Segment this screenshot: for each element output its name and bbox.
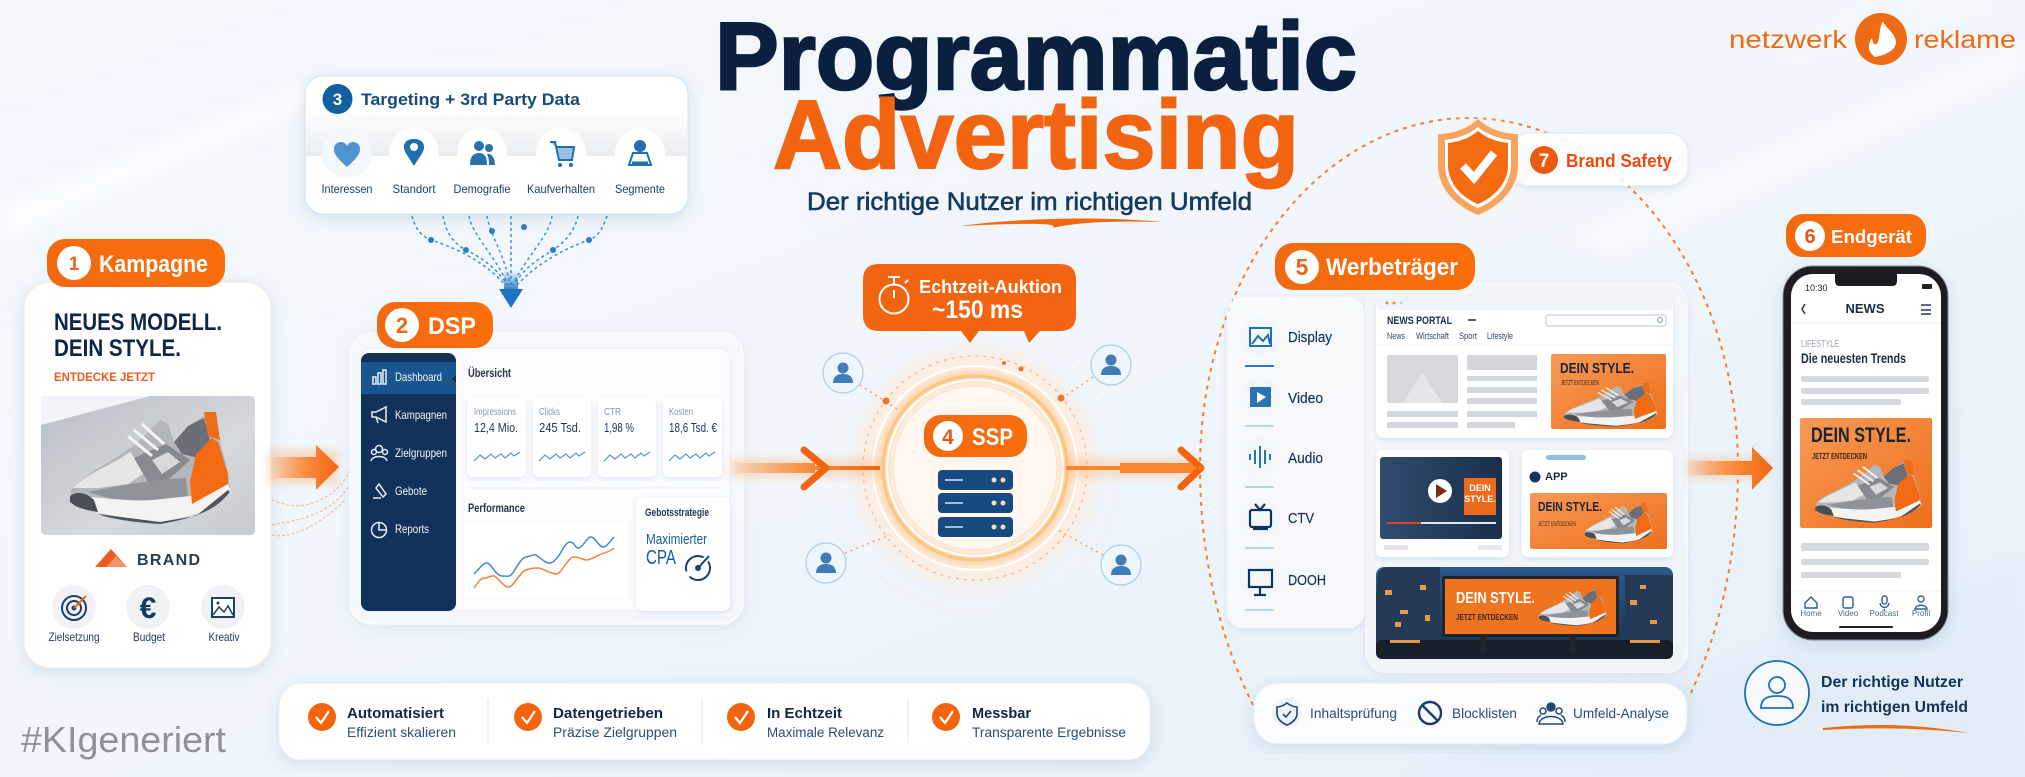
- brand logo: [95, 549, 200, 569]
- badge: 1 Kampagne: Kampagne: [99, 251, 208, 278]
- phone: end device: 10:30: [1805, 283, 1828, 293]
- benefit: automated: Automatisiert: [347, 706, 444, 722]
- SSP glow rings: [831, 324, 1119, 612]
- placement: news portal: [1376, 297, 1673, 438]
- icon: demographics: [457, 128, 507, 178]
- badge: 1 Kampagne: 1: [69, 254, 80, 275]
- icon: servers: [938, 470, 1013, 537]
- icon: euro: €: [140, 592, 157, 625]
- placement: video player: DEIN: [1469, 483, 1491, 493]
- phone tab bar: Podcast: [1870, 609, 1899, 618]
- KPI card: costs: 18,6 Tsd. €: [669, 420, 718, 435]
- icon: audience analysis: [1537, 703, 1565, 724]
- placement: video player: STYLE.: [1464, 494, 1496, 504]
- icon: image: [201, 585, 245, 629]
- badge: 6 Endgeraet: Endgerät: [1831, 227, 1912, 247]
- benefit: automated: [308, 703, 456, 740]
- panel 5: media formats container: [1227, 283, 1687, 672]
- KPI card: impressions: [467, 398, 526, 477]
- KPI card: CTR: 1,98 %: [604, 420, 634, 435]
- channel list: Audio: [1288, 450, 1323, 467]
- placement: news portal: Wirtschaft: [1416, 331, 1449, 341]
- placement: news portal: News: [1387, 331, 1405, 341]
- ad banner: [1551, 354, 1666, 429]
- panel 3: targeting and 3rd party data: [305, 76, 688, 214]
- benefit: real time: Maximale Relevanz: [767, 725, 884, 740]
- KPI card: clicks: Clicks: [539, 407, 560, 418]
- badge: 2 DSP: [377, 302, 493, 348]
- placement: news portal: Sport: [1459, 331, 1477, 341]
- phone tab bar: [1791, 591, 1941, 628]
- goal labels: Kreativ: [208, 630, 240, 644]
- KPI card: CTR: [598, 398, 656, 477]
- icon: video: [1250, 387, 1271, 407]
- product image: shoe: [41, 396, 255, 535]
- arrow: DSP to SSP: [730, 450, 880, 487]
- KPI card: clicks: 245 Tsd.: [539, 420, 581, 435]
- panel 1: campaign card: [24, 282, 271, 668]
- KPI card: impressions: Impressions: [474, 407, 516, 418]
- placement: digital billboard: [1376, 567, 1673, 659]
- icon: shield check: [1272, 698, 1302, 728]
- icon: connected TV: [1250, 504, 1271, 529]
- panel: content checks: [1254, 683, 1687, 744]
- arrow: media to device: [1687, 447, 1773, 490]
- goal labels: Budget: [133, 630, 166, 644]
- badge: 4 SSP: SSP: [972, 424, 1013, 451]
- ad in phone: [1800, 418, 1932, 528]
- performance chart: Performance: [468, 501, 525, 515]
- badge: 4 SSP: 4: [942, 426, 954, 449]
- watermark: #KIgeneriert: [21, 719, 226, 760]
- overview heading: Übersicht: [468, 365, 511, 380]
- phone: end device: Die neuesten Trends: [1801, 350, 1906, 366]
- bidding strategy card: Maximierter: [646, 531, 707, 548]
- logo: netzwerk reklame: reklame: [1914, 26, 2016, 54]
- icon: heart interests: [322, 128, 372, 178]
- badge: 3: [322, 84, 352, 114]
- panel 2: DSP dashboard: [350, 333, 743, 624]
- target labels: Kaufverhalten: [527, 182, 595, 196]
- channel list: DOOH: [1288, 572, 1326, 589]
- benefit: data driven: Präzise Zielgruppen: [553, 725, 677, 740]
- placement: mobile app: JETZT ENTDECKEN: [1538, 522, 1576, 528]
- title: Programmatic: [715, 3, 1357, 110]
- badge: 5 Werbetraeger: Werbeträger: [1326, 254, 1458, 281]
- placement: digital billboard: JETZT ENTDECKEN: [1456, 613, 1518, 622]
- benefit: data driven: Datengetrieben: [553, 706, 663, 722]
- badge: 6 Endgeraet: [1786, 214, 1926, 257]
- performance chart: [464, 488, 722, 598]
- callout: brand safety: 7: [1539, 151, 1549, 172]
- benefit: measurable: [932, 703, 1126, 740]
- channel list: [1227, 297, 1364, 628]
- channel list: Video: [1288, 390, 1323, 407]
- icon: display: [1250, 328, 1271, 346]
- benefit: data driven: [514, 703, 677, 740]
- sidebar navigation: Reports: [395, 522, 429, 536]
- icon: location: [389, 128, 439, 178]
- badge: 5 Werbetraeger: 5: [1296, 254, 1309, 280]
- benefit: measurable: Messbar: [972, 706, 1031, 722]
- tagline: right user: Der richtige Nutzer: [1821, 674, 1963, 691]
- panel: benefits bar: [279, 683, 1150, 760]
- benefit: real time: [727, 703, 884, 740]
- badge: 4 SSP: [924, 415, 1027, 457]
- badge: 3: 3: [333, 90, 342, 109]
- sidebar navigation: Dashboard: [395, 370, 442, 384]
- subtitle: [807, 188, 1252, 228]
- KPI card: CTR: CTR: [604, 407, 621, 418]
- bidding strategy card: Gebotsstrategie: [645, 507, 709, 519]
- headline: [54, 309, 222, 362]
- phone tab bar: Video: [1838, 609, 1859, 618]
- placement: mobile app: DEIN STYLE.: [1538, 499, 1602, 514]
- sidebar navigation: Zielgruppen: [395, 446, 447, 460]
- icon: blocklist: [1419, 702, 1441, 724]
- placement: news portal: NEWS PORTAL: [1387, 315, 1452, 327]
- channel list: CTV: [1288, 510, 1314, 527]
- phone tab bar: Home: [1800, 609, 1822, 618]
- icon: shopping cart: [536, 128, 586, 178]
- users around SSP: [806, 345, 1141, 585]
- benefit: automated: Effizient skalieren: [347, 725, 456, 740]
- brand safety boundary: dashed ellipse: [1200, 118, 1738, 705]
- callout: brand safety: Brand Safety: [1566, 151, 1672, 171]
- title: [715, 3, 1357, 189]
- target labels: Demografie: [454, 182, 511, 196]
- icon: digital out of home: [1249, 570, 1272, 595]
- badge: 6 Endgeraet: 6: [1804, 226, 1816, 248]
- speech bubble: real-time auction: ~150 ms: [932, 296, 1023, 324]
- title: Advertising: [773, 80, 1299, 189]
- sidebar navigation: Gebote: [395, 484, 427, 498]
- data funnel to DSP: [412, 216, 607, 308]
- target labels: Segmente: [615, 182, 665, 196]
- bidding strategy card: [636, 497, 730, 611]
- logo: netzwerk reklame: netzwerk: [1729, 26, 1848, 54]
- headline: NEUES MODELL.: [54, 309, 222, 336]
- call to action: ENTDECKE JETZT: [54, 370, 156, 384]
- tagline: right user: [1821, 674, 1968, 733]
- goal labels: [48, 630, 240, 644]
- panel: content checks: Blocklisten: [1452, 705, 1517, 721]
- benefit: real time: In Echtzeit: [767, 706, 842, 722]
- phone: end device: NEWS: [1846, 301, 1885, 316]
- callout: brand safety: [1510, 133, 1688, 186]
- badge: 5 Werbetraeger: [1275, 243, 1475, 290]
- badge: 2 DSP: DSP: [428, 313, 476, 340]
- panel: content checks: Umfeld-Analyse: [1573, 705, 1669, 721]
- benefit: measurable: Transparente Ergebnisse: [972, 725, 1126, 740]
- phone: end device: [1783, 266, 1948, 640]
- speech bubble: real-time auction: [863, 264, 1076, 343]
- icon: target: [52, 585, 96, 629]
- icon: euro: [126, 585, 170, 629]
- KPI card: costs: Kosten: [669, 407, 693, 418]
- placement: mobile app: [1522, 450, 1673, 557]
- KPI card: impressions: 12,4 Mio.: [474, 420, 518, 435]
- KPI card: clicks: [533, 398, 591, 477]
- sidebar navigation: [361, 353, 456, 611]
- subtitle: Der richtige Nutzer im richtigen Umfeld: [807, 188, 1252, 216]
- arrow: campaign to DSP: [268, 445, 350, 536]
- ad in phone: DEIN STYLE.: [1811, 424, 1911, 447]
- ad banner: DEIN STYLE.: [1560, 360, 1634, 377]
- panel: content checks: Inhaltsprüfung: [1310, 705, 1397, 721]
- phone: end device: LIFESTYLE: [1801, 339, 1839, 350]
- sidebar navigation: Kampagnen: [395, 408, 447, 422]
- badge: 2 DSP: 2: [396, 313, 408, 338]
- placement: digital billboard: DEIN STYLE.: [1456, 590, 1535, 607]
- KPI card: costs: [663, 398, 722, 477]
- headline: DEIN STYLE.: [54, 335, 181, 362]
- tagline: right user: im richtigen Umfeld: [1821, 699, 1968, 716]
- icon: audio: [1250, 446, 1270, 468]
- ad in phone: JETZT ENTDECKEN: [1812, 452, 1867, 461]
- logo: netzwerk reklame: [1729, 13, 2016, 65]
- placement: mobile app: APP: [1545, 471, 1568, 483]
- bidding strategy card: CPA: [646, 547, 676, 569]
- heading: targeting: Targeting + 3rd Party Data: [361, 90, 581, 109]
- arrow: SSP to Werbetraeger: [1066, 450, 1201, 487]
- brand logo: BRAND: [137, 552, 200, 569]
- channel list: Display: [1288, 329, 1332, 346]
- speech bubble: real-time auction: Echtzeit-Auktion: [919, 277, 1062, 297]
- badge: 1 Kampagne: [47, 239, 225, 287]
- placement: video player: [1376, 450, 1509, 557]
- target labels: Standort: [392, 182, 436, 196]
- icon: segments: [615, 128, 665, 178]
- icon: stopwatch: [880, 277, 908, 314]
- icon: right user: [1745, 661, 1809, 725]
- phone tab bar: Profil: [1912, 609, 1930, 618]
- target labels: Interessen: [322, 182, 372, 196]
- icon: shield: [1422, 106, 1534, 230]
- goal labels: Zielsetzung: [48, 630, 100, 644]
- target labels: [322, 182, 665, 196]
- placement: news portal: Lifestyle: [1487, 331, 1513, 341]
- ad banner: JETZT ENTDECKEN: [1561, 380, 1599, 387]
